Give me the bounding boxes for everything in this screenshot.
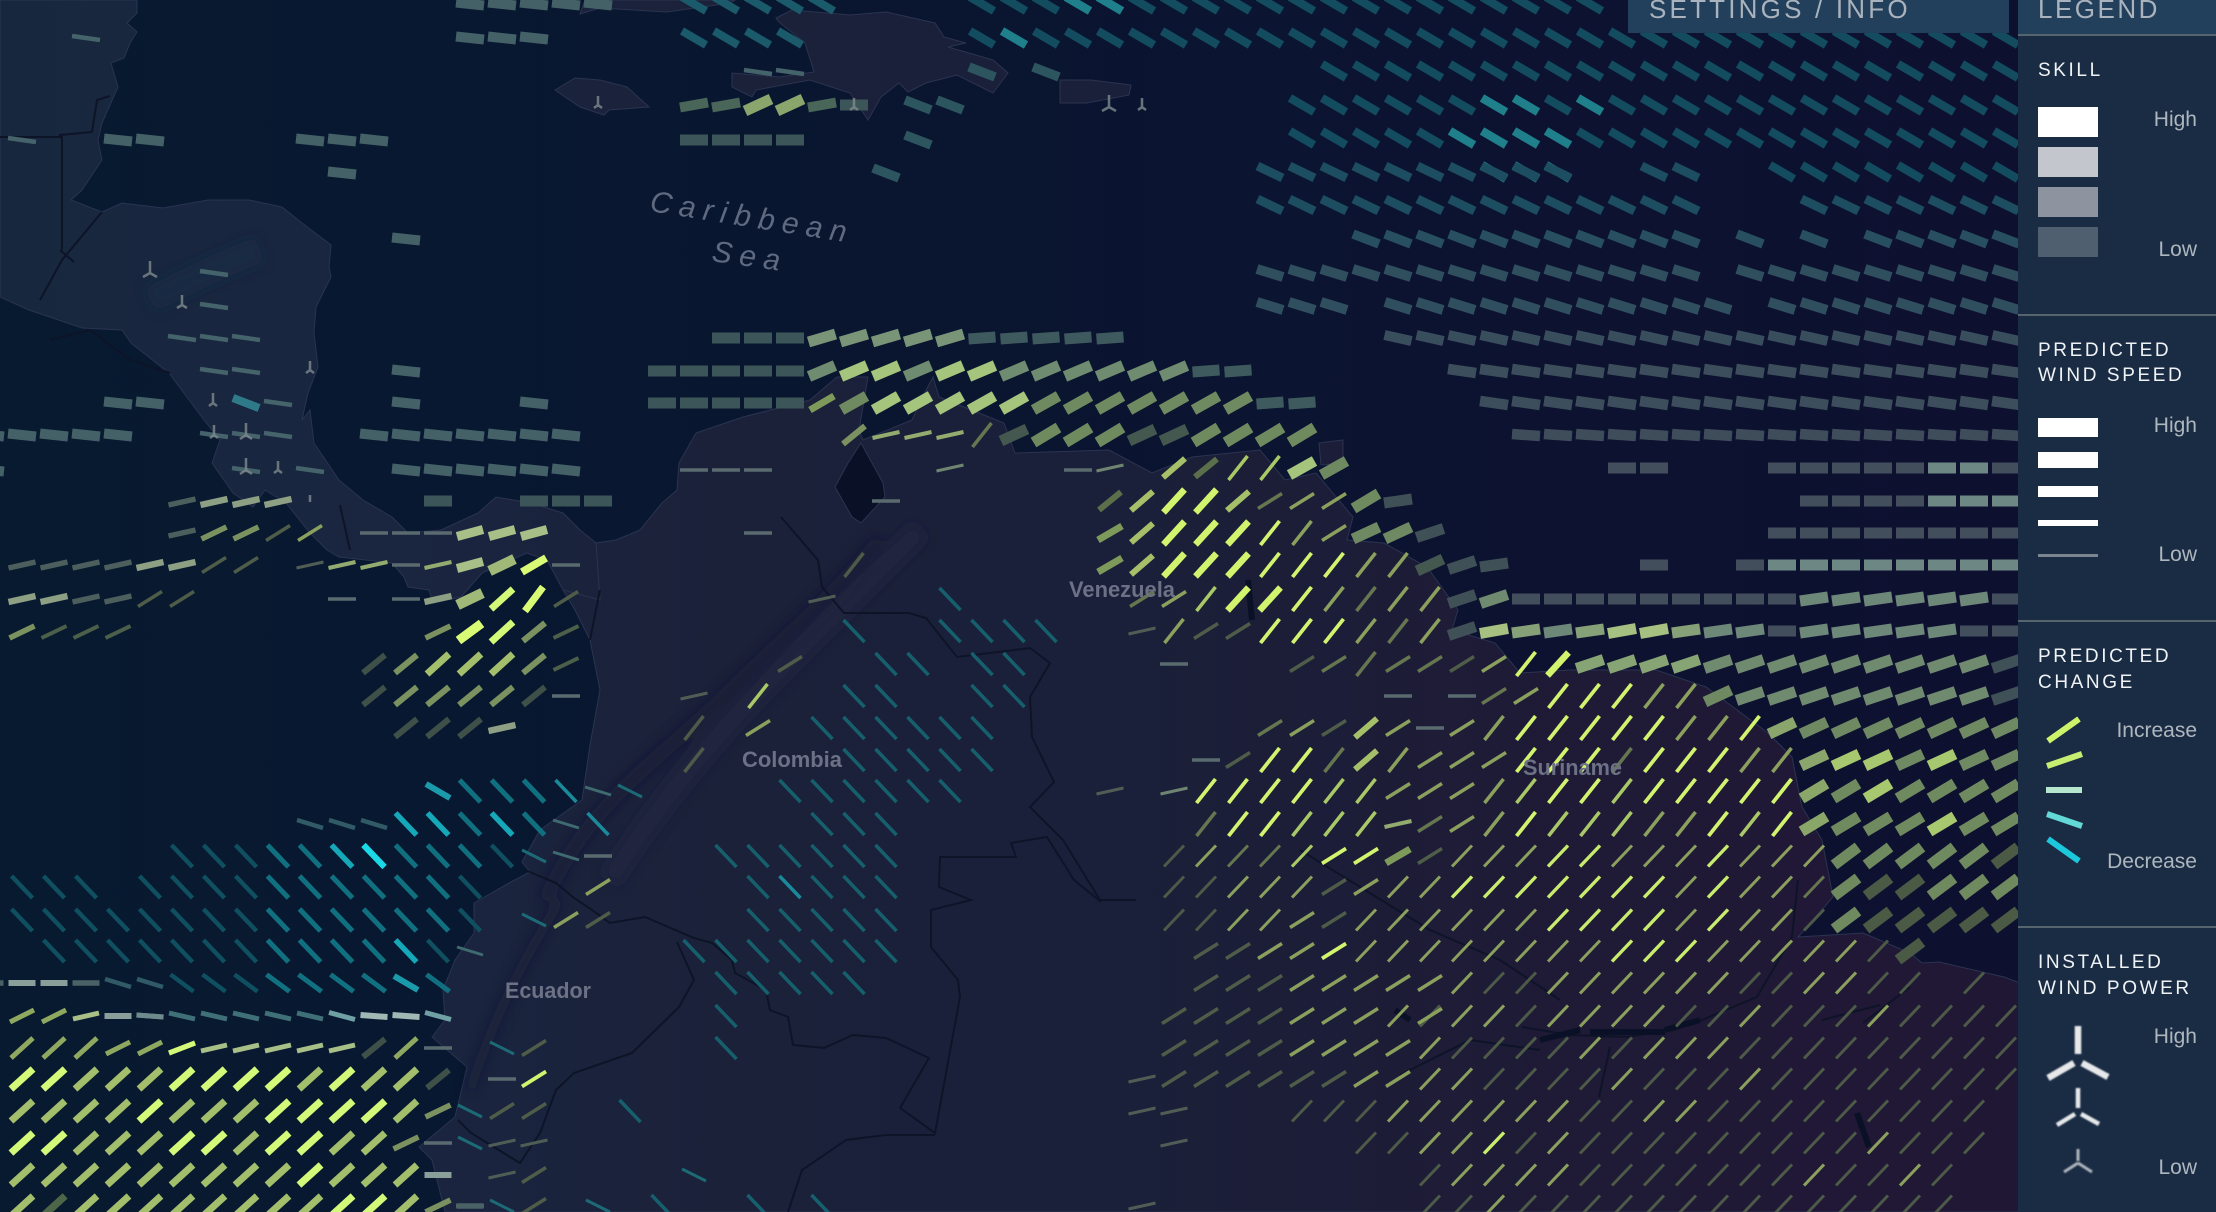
map: mountain relief — [150, 250, 920, 1090]
map: country borders and rivers — [0, 96, 1910, 1212]
legend section: predicted wind speed: PREDICTED — [2038, 340, 2171, 361]
map labels: countries: Ecuador — [505, 978, 591, 1003]
map: installed wind turbines — [143, 95, 1146, 502]
legend section: predicted change: Decrease — [2107, 850, 2197, 873]
legend section: predicted wind speed: Low — [2158, 543, 2198, 566]
wind bars: Venezuela and Guiana land — [310, 435, 1782, 1206]
map labels: countries: Venezuela — [1069, 577, 1176, 602]
map labels: countries — [505, 577, 1622, 1003]
legend section: predicted wind speed: WIND SPEED — [2038, 365, 2184, 386]
wind bars: north Atlantic — [982, 4, 2006, 631]
settings and info button — [1628, 0, 2009, 33]
map labels: countries: Suriname — [1523, 755, 1622, 780]
wind bars: central Caribbean — [0, 4, 1398, 856]
legend section: predicted wind speed: High — [2154, 414, 2197, 437]
legend section: skill: Low — [2158, 238, 2198, 261]
legend section: installed wind power — [2038, 952, 2198, 1179]
legend section: predicted change: Increase — [2116, 719, 2197, 742]
wind bars: Pacific and Colombia teal field — [0, 599, 1046, 1206]
legend section: installed wind power: WIND POWER — [2038, 978, 2192, 999]
map labels: countries: Colombia — [742, 747, 843, 772]
legend section: installed wind power: Low — [2158, 1156, 2198, 1179]
legend section: installed wind power: High — [2154, 1025, 2197, 1048]
map label: Caribbean Sea — [648, 185, 856, 278]
wind bars: Atlantic green band — [758, 105, 2006, 951]
map label: Caribbean Sea: Sea — [710, 235, 790, 278]
legend section: skill: High — [2154, 108, 2197, 131]
map label: Caribbean Sea: Caribbean — [648, 185, 856, 250]
legend section: installed wind power: INSTALLED — [2038, 952, 2163, 973]
wind bars: west Caribbean and Panama — [22, 502, 566, 1206]
legend section: predicted change: PREDICTED — [2038, 646, 2171, 667]
wind bars: eastern lowland field — [150, 533, 2006, 1206]
legend section: predicted change — [2038, 646, 2197, 873]
panel: legend — [2018, 0, 2216, 1212]
legend section: skill — [2038, 60, 2198, 261]
legend section: predicted wind speed — [2038, 340, 2198, 566]
legend section: skill: SKILL — [2038, 60, 2103, 81]
legend section: predicted change: CHANGE — [2038, 672, 2135, 693]
